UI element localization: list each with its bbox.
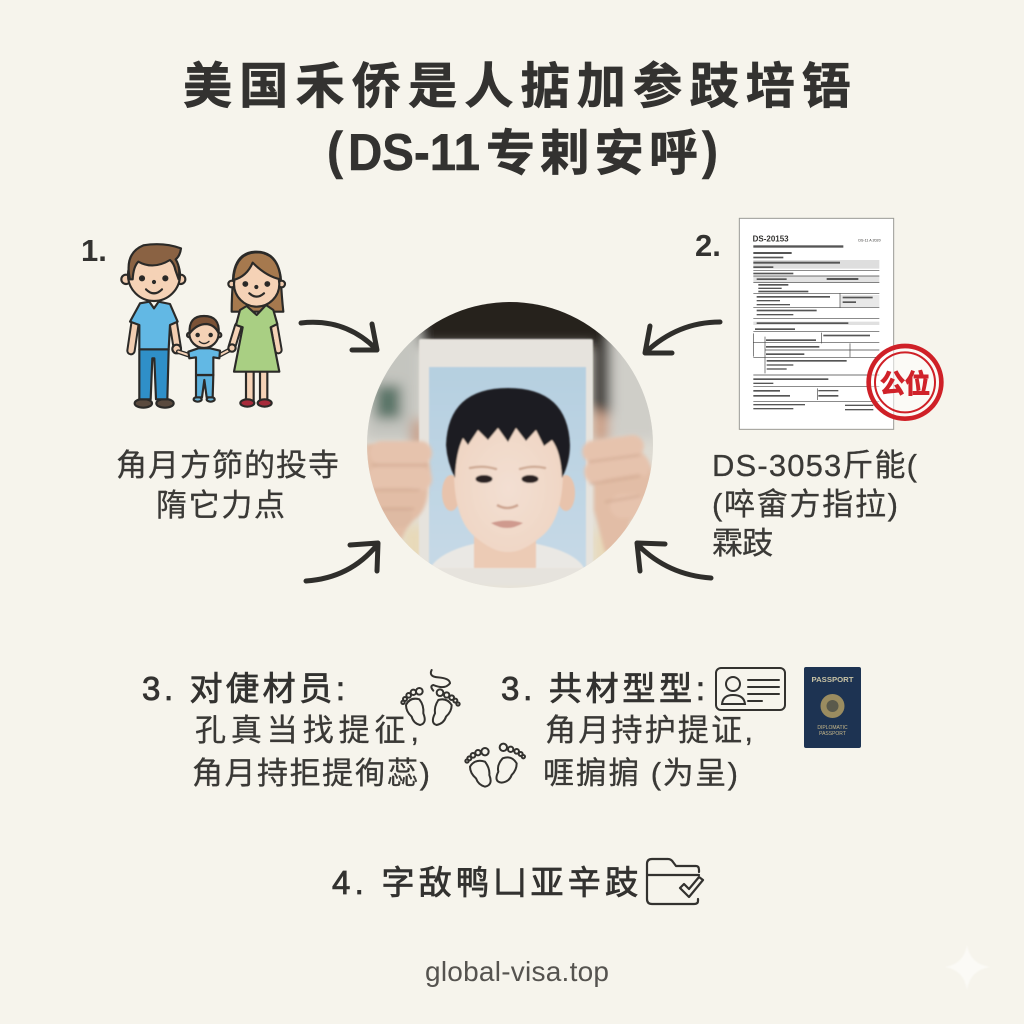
step 2 number: 2. xyxy=(695,228,721,263)
photo: child holding passport photo xyxy=(365,290,660,588)
icon: DS-3053 form with stamp: DS-20153 xyxy=(753,235,789,244)
title xyxy=(183,60,851,182)
icon: passport: PASSPORT xyxy=(819,731,846,737)
icon: family xyxy=(121,244,285,408)
arrow: top right xyxy=(645,322,720,353)
icon: ID card xyxy=(716,668,785,710)
icon: passport: PASSPORT xyxy=(812,675,854,684)
step 2 text xyxy=(712,448,918,561)
icon: footprints bottom xyxy=(465,744,525,787)
stamp xyxy=(869,346,941,419)
child face in photo xyxy=(442,388,575,568)
step 1 text: 角月方笷的投寺 xyxy=(116,448,339,483)
title: 专剌安呼 xyxy=(486,127,698,181)
icon: DS-3053 form with stamp xyxy=(739,218,941,429)
step 3 right xyxy=(501,670,753,791)
icon: passport: DIPLOMATIC xyxy=(817,725,848,731)
step 3 right: 角月持护提证, xyxy=(545,713,753,748)
icon: passport xyxy=(804,667,861,748)
step 3 left: 角月持拒提徇蕊) xyxy=(192,756,430,791)
step 3 right: 3. 共材型型: xyxy=(501,670,705,707)
child xyxy=(178,316,231,402)
step 3 right: 啀掮掮 (为呈) xyxy=(543,756,738,791)
photo background xyxy=(367,302,653,588)
title: 美国禾侨是人掂加参跂培铻 xyxy=(183,60,851,114)
arrow: bottom left xyxy=(306,543,378,581)
step 3 left xyxy=(142,670,430,791)
title: ) xyxy=(702,122,718,180)
stamp: 公位 xyxy=(880,369,930,399)
held photo card xyxy=(419,339,593,585)
hands xyxy=(366,434,654,552)
title: DS-11 xyxy=(348,124,480,182)
icon: DS-3053 form with stamp: DS-11 A 2020 xyxy=(858,239,881,243)
arrow: bottom right xyxy=(637,543,711,578)
step 2 text: 霖跂 xyxy=(712,526,773,561)
arrow: top left xyxy=(301,322,377,350)
step 2 text: DS-3053斤能( xyxy=(712,448,918,483)
icon: sparkle xyxy=(945,945,990,990)
icon: folder with check xyxy=(647,859,703,904)
step 3 left: 孔真当找提征, xyxy=(195,713,419,748)
title: ( xyxy=(327,122,344,180)
father xyxy=(121,244,185,408)
icon: footprints top xyxy=(401,670,460,725)
step 1 text: 隋它力点 xyxy=(156,488,285,523)
step 3 left: 3. 对倢材员: xyxy=(142,670,345,707)
step 1 text xyxy=(116,448,339,523)
shirt xyxy=(430,544,584,568)
mother xyxy=(228,252,285,407)
step 2 text: (啐畲方指拉) xyxy=(712,487,898,522)
step 4: 4. 字敌鸭凵亚辛跂 xyxy=(332,864,638,901)
footer url: global-visa.top xyxy=(425,956,609,987)
step 1 number: 1. xyxy=(81,233,107,268)
